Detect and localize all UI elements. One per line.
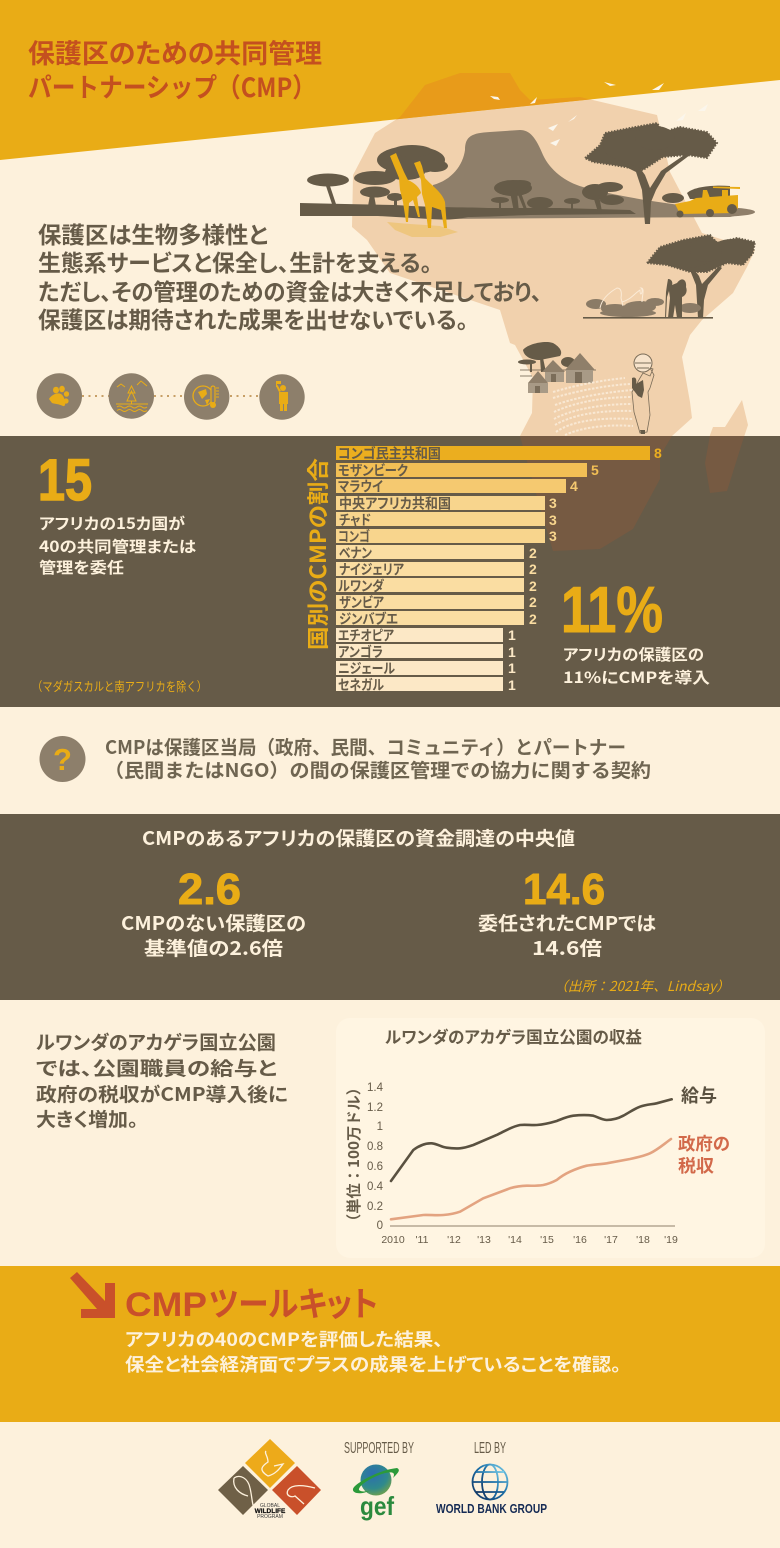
intro text: ただし、その管理のための資金は大きく不足しており、 bbox=[38, 273, 542, 307]
stat: 2.6: 基準値の2.6倍 bbox=[144, 934, 283, 961]
stat: 2.6 bbox=[121, 865, 306, 961]
bar chart: 3 bbox=[549, 528, 557, 544]
stat: 11 percent: アフリカの保護区の bbox=[563, 643, 704, 665]
small acacias left bbox=[307, 171, 403, 206]
Rwanda text: では、公園職員の給与と bbox=[36, 1054, 277, 1081]
ploughed field bbox=[553, 378, 633, 435]
panel: line chart: '14 bbox=[508, 1234, 522, 1246]
bar chart: アンゴラ bbox=[338, 642, 383, 662]
footnote: （マダガスカルと南アフリカを除く） bbox=[32, 676, 207, 695]
icon: person bbox=[259, 374, 305, 420]
bar chart: 2 bbox=[529, 561, 537, 577]
panel: line chart: '15 bbox=[540, 1234, 554, 1246]
bar chart: 1 bbox=[508, 644, 516, 660]
birds bbox=[490, 82, 708, 146]
bar chart bbox=[336, 444, 662, 695]
stat: 15 countries: アフリカの15カ国が bbox=[39, 512, 186, 534]
label: salaries: 給与 bbox=[681, 1082, 717, 1108]
title: 保護区のための共同管理 bbox=[28, 32, 322, 71]
bar chart: コンゴ民主共和国 bbox=[338, 444, 441, 464]
map of Africa inside banner bbox=[396, 73, 590, 120]
y axis labels: 0.4 bbox=[367, 1181, 384, 1193]
panel: line chart: '18 bbox=[636, 1234, 650, 1246]
stat: 2.6: CMPのない保護区の bbox=[121, 909, 306, 936]
toolkit text bbox=[125, 1326, 621, 1377]
title: パートナーシップ（CMP） bbox=[28, 66, 316, 105]
panel: CMP toolkit bbox=[0, 1266, 780, 1422]
logo: World Bank Group: LED BY bbox=[474, 1440, 506, 1457]
huts bbox=[528, 353, 595, 393]
map of Africa bbox=[352, 100, 755, 436]
bar chart: 3 bbox=[549, 495, 557, 511]
y axis labels: 0.6 bbox=[367, 1161, 383, 1173]
icon: question mark bbox=[40, 736, 86, 782]
bar chart: 2 bbox=[529, 578, 537, 594]
Rwanda text bbox=[36, 1028, 288, 1132]
bar chart: モザンビーク bbox=[338, 460, 408, 480]
tree behind giraffes bbox=[377, 145, 448, 180]
panel: median funding bbox=[0, 814, 780, 1000]
bar chart: 1 bbox=[508, 660, 516, 676]
toolkit text: アフリカの40のCMPを評価した結果、 bbox=[125, 1326, 443, 1352]
source: （出所：2021年、Lindsay） bbox=[554, 975, 730, 995]
panel: line chart: 2010 bbox=[381, 1234, 405, 1246]
giraffes bbox=[387, 153, 458, 237]
definition: what is CMP: （民間またはNGO）の間の保護区管理での協力に関する契約 bbox=[104, 756, 651, 783]
trees by huts bbox=[518, 342, 596, 376]
chart title: ルワンダのアカゲラ国立公園の収益 bbox=[385, 1024, 642, 1048]
southern Africa map bbox=[520, 436, 744, 551]
toolkit heading: ツールキット bbox=[209, 1277, 378, 1326]
y axis labels: 0 bbox=[377, 1220, 383, 1232]
bar chart: コンゴ bbox=[338, 526, 370, 546]
stat: 14.6: 14.6 bbox=[523, 865, 605, 914]
toolkit heading: CMP bbox=[125, 1286, 207, 1324]
mesa bbox=[430, 130, 753, 219]
panel: line chart: '11 bbox=[416, 1234, 429, 1246]
intro text: 保護区は期待された成果を出せないでいる。 bbox=[38, 301, 468, 335]
intro text: 保護区は生物多様性と bbox=[38, 216, 268, 250]
top banner bbox=[0, 0, 780, 160]
toolkit text: 保全と社会経済面でプラスの成果を上げていることを確認。 bbox=[125, 1351, 621, 1377]
panel: line chart: '19 bbox=[664, 1234, 678, 1246]
panel heading: CMPのあるアフリカの保護区の資金調達の中央値 bbox=[142, 824, 575, 851]
label: tax revenue: 税収 bbox=[678, 1153, 715, 1178]
label: tax revenue: 政府の bbox=[678, 1131, 730, 1156]
y axis labels: 0.2 bbox=[367, 1201, 383, 1213]
logo: Global Wildlife Program: WILDLIFE bbox=[255, 1508, 286, 1515]
stat: 15 countries bbox=[38, 448, 196, 578]
bar chart: ジンバブエ bbox=[339, 609, 398, 629]
bar chart: ニジェール bbox=[338, 658, 395, 678]
bar chart: エチオピア bbox=[338, 626, 394, 646]
stat: 15 countries: 40の共同管理または bbox=[39, 535, 196, 557]
right acacia tree bbox=[647, 235, 755, 318]
panel: line chart bbox=[336, 1018, 765, 1258]
bar chart: 5 bbox=[591, 462, 599, 478]
icon: arrow bbox=[70, 1272, 115, 1318]
bar chart: 3 bbox=[549, 512, 557, 528]
mid trees on mesa bbox=[491, 180, 684, 212]
stat: 14.6: 14.6倍 bbox=[532, 934, 602, 961]
bar chart: マラウイ bbox=[338, 476, 383, 496]
Rwanda text: ルワンダのアカゲラ国立公園 bbox=[36, 1028, 276, 1055]
panel: line chart: '16 bbox=[573, 1234, 587, 1246]
logo: World Bank Group bbox=[436, 1440, 547, 1516]
jeep bbox=[675, 186, 755, 218]
icon: paw bbox=[37, 373, 82, 419]
y axis labels bbox=[367, 1082, 384, 1232]
ground strip bbox=[300, 203, 636, 220]
hiker bbox=[665, 279, 687, 318]
bar chart: チャド bbox=[339, 510, 371, 530]
title bbox=[28, 32, 322, 105]
stat: 11 percent: 11% bbox=[561, 573, 663, 646]
stat: 11 percent: 11%にCMPを導入 bbox=[563, 666, 711, 688]
logo: Global Wildlife Program: GLOBAL bbox=[260, 1503, 280, 1509]
bar chart: ルワンダ bbox=[338, 576, 384, 596]
stat: 11 percent bbox=[561, 573, 711, 688]
intro text bbox=[38, 216, 542, 335]
logo: Global Wildlife Program: PROGRAM bbox=[257, 1514, 283, 1520]
panel: line chart: '13 bbox=[477, 1234, 491, 1246]
bar chart: 中央アフリカ共和国 bbox=[339, 494, 451, 514]
bar chart: セネガル bbox=[338, 675, 384, 695]
x axis bbox=[390, 1225, 675, 1227]
line: government tax revenue bbox=[391, 1139, 671, 1219]
stat: 15 countries: 管理を委任 bbox=[39, 556, 124, 578]
definition: what is CMP bbox=[40, 733, 651, 783]
bar chart: ザンビア bbox=[339, 592, 384, 612]
bar chart: 2 bbox=[529, 594, 537, 610]
icon: globe and thermometer bbox=[184, 374, 229, 420]
logo: World Bank Group: WORLD BANK GROUP bbox=[436, 1502, 547, 1516]
bar chart: 4 bbox=[570, 478, 578, 494]
y axis labels: 1.2 bbox=[367, 1102, 383, 1114]
bar chart: 1 bbox=[508, 627, 516, 643]
stat: 14.6: 委任されたCMPでは bbox=[478, 909, 656, 936]
Rwanda text: 政府の税収がCMP導入後に bbox=[36, 1080, 288, 1107]
chart axis title: 国別のCMPの割合 bbox=[301, 458, 333, 650]
toolkit heading bbox=[125, 1277, 378, 1326]
icon: question mark: ? bbox=[53, 742, 72, 777]
bar chart: 2 bbox=[529, 545, 537, 561]
stat: 15 countries: 15 bbox=[38, 448, 92, 513]
bar chart: ナイジェリア bbox=[339, 560, 404, 580]
shrubs and gorillas bbox=[583, 288, 713, 319]
intro text: 生態系サービスと保全し、生計を支える。 bbox=[38, 244, 432, 278]
y axis title: （単位：100万ドル） bbox=[343, 1080, 364, 1229]
y axis labels: 1 bbox=[377, 1121, 383, 1133]
stat: 2.6: 2.6 bbox=[178, 865, 241, 914]
logo: Global Wildlife Program bbox=[218, 1439, 321, 1520]
logo: GEF bbox=[344, 1440, 414, 1521]
label: tax revenue bbox=[678, 1131, 730, 1178]
panel: CMP by country bbox=[0, 436, 780, 707]
bar chart: 2 bbox=[529, 611, 537, 627]
large acacia tree bbox=[585, 123, 717, 224]
illustration: savanna landscape bbox=[300, 82, 755, 435]
logo: GEF: gef bbox=[360, 1491, 394, 1521]
bar chart: ベナン bbox=[339, 543, 372, 563]
definition: what is CMP: CMPは保護区当局（政府、民間、コミュニティ）とパートナー bbox=[105, 733, 626, 760]
y axis labels: 1.4 bbox=[367, 1082, 384, 1094]
woman carrying pot bbox=[632, 354, 654, 434]
bar chart: 8 bbox=[654, 445, 662, 461]
line: salaries bbox=[391, 1099, 672, 1181]
Rwanda text: 大きく増加。 bbox=[36, 1105, 138, 1132]
bar chart: 1 bbox=[508, 677, 516, 693]
icon row bbox=[37, 373, 305, 420]
panel: line chart: '12 bbox=[447, 1234, 461, 1246]
stat: 14.6 bbox=[478, 865, 656, 961]
icon: forest and water bbox=[109, 373, 154, 419]
panel: line chart: '17 bbox=[604, 1234, 618, 1246]
logo: GEF: SUPPORTED BY bbox=[344, 1440, 414, 1457]
y axis labels: 0.8 bbox=[367, 1141, 383, 1153]
